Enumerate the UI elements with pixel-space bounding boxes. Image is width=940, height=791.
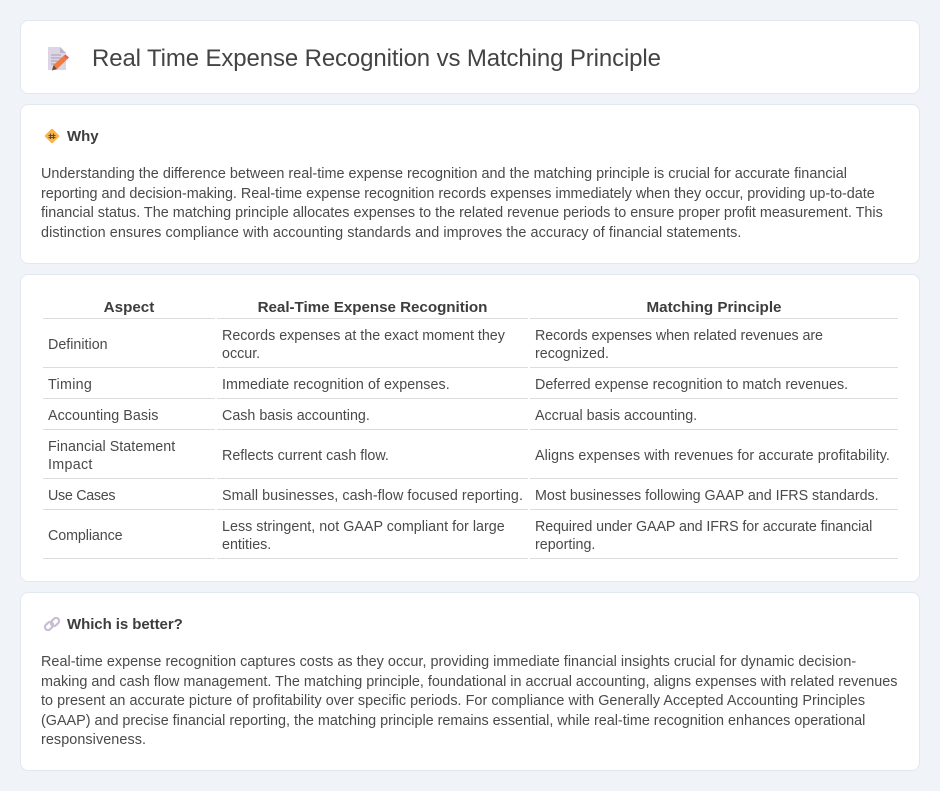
header: real-time: Real-Time Expense Recognition [258,299,487,316]
text block: why: reporting and decision-making. Real-time expense recognition records expenses immediately when they occur, providing up-to-date [41,186,875,202]
comparison table: entities. [222,537,271,553]
text block: why [41,166,883,241]
panel: comparison table [20,274,920,582]
text block: why: Understanding the difference between real-time expense recognition and the matching principle is crucial for accurate financial [41,166,847,182]
header: matching: Matching Principle [646,299,782,316]
comparison table [43,299,898,559]
row: compliance: Compliance [48,528,122,544]
comparison table: Most businesses following GAAP and IFRS standards. [535,488,879,504]
row: definition: Definition [48,337,108,353]
comparison table: Required under GAAP and IFRS for accurate financial [535,519,872,535]
heading: which is better: Which is better? [67,616,183,633]
panel: why [20,104,920,264]
text block: which is better [41,654,897,748]
comparison table: Immediate recognition of expenses. [222,377,450,393]
heading: why: Why [67,128,98,145]
icon: link [44,616,60,632]
panel: which is better [20,592,920,771]
comparison table: Deferred expense recognition to match revenues. [535,377,848,393]
comparison table: Records expenses at the exact moment they [222,328,505,344]
comparison table: occur. [222,346,260,362]
comparison table: reporting. [535,537,595,553]
text block: which is better: making and cash flow management. The matching principle, foundational in accrual accounting, aligns expenses with related revenues [41,674,897,690]
comparison table: Reflects current cash flow. [222,448,389,464]
text block: which is better: Real-time expense recognition captures costs as they occur, providing immediate financial insights crucial for dynamic decision- [41,654,856,670]
text block: why: financial status. The matching principle allocates expenses to the related revenue periods to ensure proper profit measurement. This [41,205,883,221]
text block: why: distinction ensures compliance with accounting standards and improves the accuracy of financial statements. [41,225,741,241]
title: Real Time Expense Recognition vs Matching Principle [92,45,661,72]
row: financial statement impact: Impact [48,457,93,473]
comparison table: Aligns expenses with revenues for accurate profitability. [535,448,890,464]
comparison table: Records expenses when related revenues are [535,328,823,344]
panel: title card [20,20,920,94]
comparison table: recognized. [535,346,609,362]
comparison table: Cash basis accounting. [222,408,370,424]
text block: which is better: (GAAP) and precise financial reporting, the matching principle remains essential, while real-time recognition enhances operational [41,713,865,729]
icon: document with pencil [48,47,69,70]
row: accounting basis: Accounting Basis [48,408,158,424]
comparison table: Accrual basis accounting. [535,408,697,424]
row: financial statement impact [48,439,176,473]
row: use cases: Use Cases [48,488,115,504]
header: aspect: Aspect [104,299,154,316]
row: financial statement impact: Financial Statement [48,439,175,455]
row: timing: Timing [48,377,92,393]
comparison table: Small businesses, cash-flow focused reporting. [222,488,523,504]
text block: which is better: responsiveness. [41,732,146,748]
comparison table: Less stringent, not GAAP compliant for large [222,519,505,535]
icon: diamond sign [44,128,60,144]
text block: which is better: to present an accurate picture of profitability over specific periods. For compliance with Generally Accepted Accounting Principles [41,693,865,709]
